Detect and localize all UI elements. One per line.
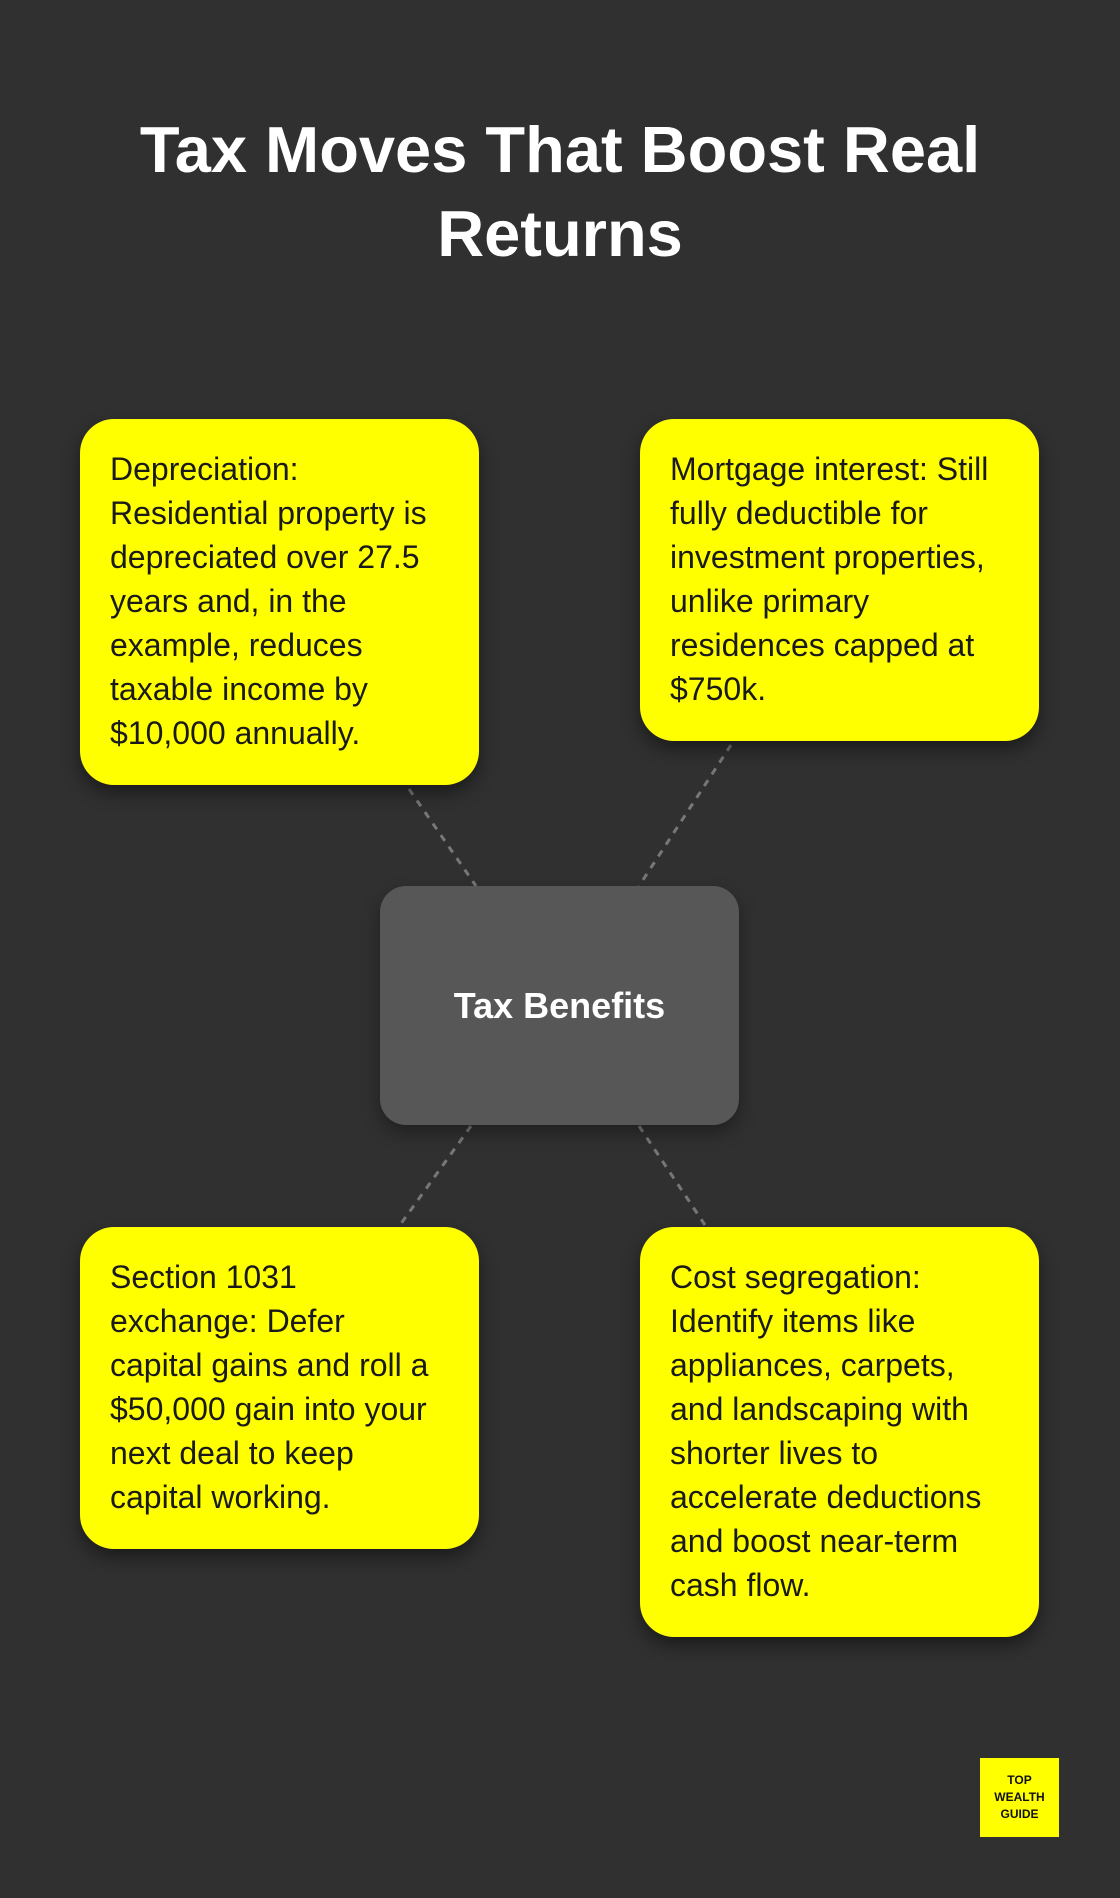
logo	[980, 1758, 1059, 1837]
panel: cost segregation: appliances, carpets,	[670, 1347, 955, 1383]
panel: section 1031: capital working.	[110, 1479, 331, 1515]
panel: cost segregation: Identify items like	[670, 1303, 915, 1339]
title: Tax Moves That Boost Real	[140, 113, 980, 186]
panel: cost segregation: Cost segregation:	[670, 1259, 921, 1295]
panel: cost segregation: accelerate deductions	[670, 1479, 981, 1515]
panel: section 1031: exchange: Defer	[110, 1303, 345, 1339]
center node: Tax Benefits	[454, 984, 665, 1026]
panel: depreciation: $10,000 annually.	[110, 715, 360, 751]
panel: section 1031: $50,000 gain into your	[110, 1391, 427, 1427]
panel: depreciation: years and, in the	[110, 583, 347, 619]
panel: depreciation: taxable income by	[110, 671, 368, 707]
panel: section 1031: capital gains and roll a	[110, 1347, 428, 1383]
panel: section 1031: Section 1031	[110, 1259, 297, 1295]
logo: WEALTH	[994, 1790, 1045, 1804]
title	[140, 113, 980, 270]
panel: mortgage interest	[640, 419, 1039, 741]
panel: cost segregation: shorter lives to	[670, 1435, 878, 1471]
logo: TOP	[1007, 1773, 1032, 1787]
panel: cost segregation	[640, 1227, 1039, 1637]
panel: mortgage interest: unlike primary	[670, 583, 869, 619]
panel: depreciation: Depreciation:	[110, 451, 299, 487]
panel: cost segregation: and landscaping with	[670, 1391, 969, 1427]
logo: GUIDE	[1000, 1807, 1038, 1821]
title: Returns	[437, 197, 683, 270]
panel: section 1031	[80, 1227, 479, 1549]
panel: depreciation: Residential property is	[110, 495, 427, 531]
panel: section 1031: next deal to keep	[110, 1435, 354, 1471]
center node	[380, 886, 739, 1125]
panel: cost segregation: cash flow.	[670, 1567, 811, 1603]
panel: mortgage interest: fully deductible for	[670, 495, 928, 531]
panel: mortgage interest: residences capped at	[670, 627, 974, 663]
panel: mortgage interest: Mortgage interest: Still	[670, 451, 988, 487]
panel: mortgage interest: $750k.	[670, 671, 766, 707]
panel: depreciation: depreciated over 27.5	[110, 539, 420, 575]
panel: depreciation: example, reduces	[110, 627, 363, 663]
panel: mortgage interest: investment properties,	[670, 539, 985, 575]
panel: cost segregation: and boost near-term	[670, 1523, 958, 1559]
panel: depreciation	[80, 419, 479, 785]
